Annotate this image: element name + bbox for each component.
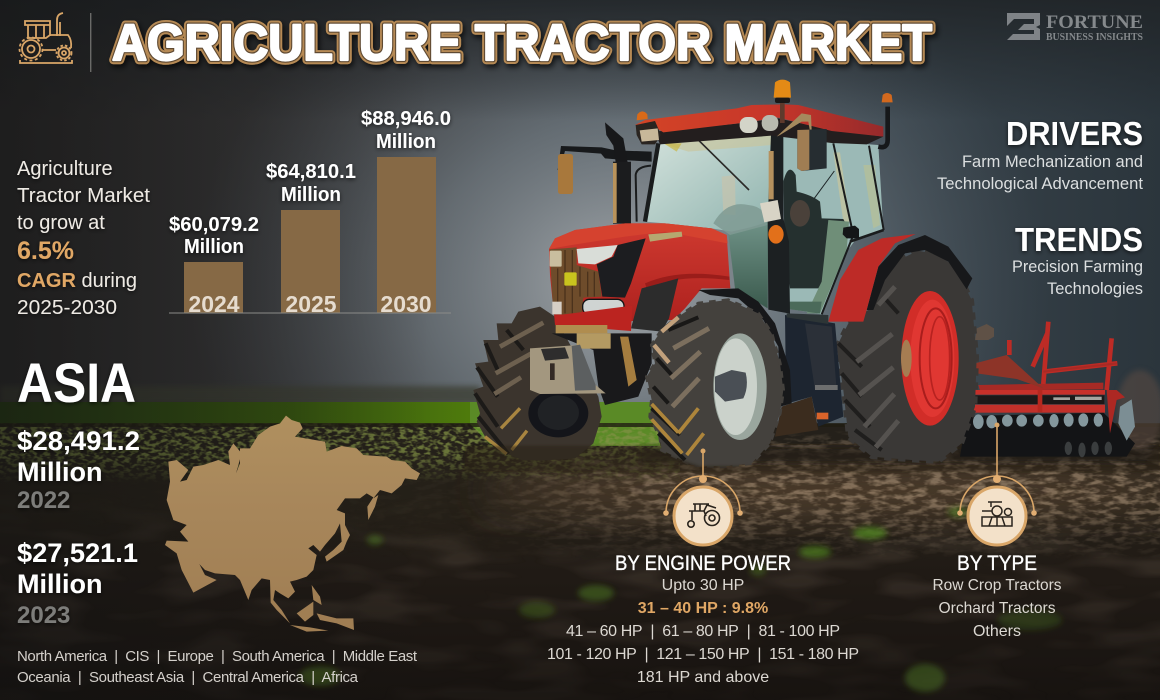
cab roof	[635, 104, 883, 137]
field dirt at wheel base	[465, 440, 1160, 472]
CAGR text block: to grow at	[17, 212, 105, 234]
bar 2030: 2030	[380, 291, 432, 317]
title: AGRICULTURE TRACTOR MARKET	[112, 14, 932, 71]
beacons	[774, 80, 791, 98]
CAGR text block: 2025-2030	[17, 297, 117, 319]
Asia stats: ASIA	[17, 351, 136, 414]
Asia stats	[17, 351, 140, 629]
bar 2030: Million	[376, 131, 436, 153]
icon: tractor on field	[982, 502, 1012, 526]
drivers block	[937, 115, 1143, 193]
bar 2030: $88,946.0	[361, 107, 451, 130]
trends block	[1012, 221, 1143, 298]
logo: Fortune Business Insights: FORTUNE	[1046, 12, 1143, 33]
Asia stats: Million	[17, 569, 102, 599]
CAGR text block	[17, 158, 150, 319]
trends block: TRENDS	[1015, 221, 1143, 258]
engine power segment text: 31 – 40 HP : 9.8%	[638, 600, 768, 617]
other regions list: North America | CIS | Europe | South America | Middle East	[17, 648, 418, 665]
front ballast and engine underside	[530, 325, 652, 405]
type segment text: Orchard Tractors	[938, 600, 1056, 617]
map: Asia	[165, 416, 420, 632]
engine power segment text: BY ENGINE POWER	[615, 552, 791, 575]
fenders	[698, 234, 972, 407]
trends block: Precision Farming	[1012, 258, 1143, 276]
bar 2024	[169, 213, 259, 317]
type segment text	[932, 552, 1062, 640]
engine power segment text: 181 HP and above	[637, 669, 769, 686]
out-of-focus seedlings	[300, 507, 1062, 692]
bar chart	[169, 107, 451, 317]
bar 2024: $60,079.2	[169, 213, 259, 236]
drivers block: DRIVERS	[1006, 115, 1143, 152]
logo: Fortune Business Insights: BUSINESS INSIGHTS	[1046, 31, 1143, 43]
CAGR text block: Tractor Market	[17, 185, 150, 207]
bar 2025: Million	[281, 184, 341, 206]
title: AGRICULTURE TRACTOR MARKET	[112, 14, 932, 71]
right mirror	[797, 129, 827, 171]
drivers block: Technological Advancement	[937, 175, 1143, 193]
steps and chassis	[775, 313, 843, 437]
connector and icon: type	[957, 422, 1037, 545]
bar 2024: Million	[184, 236, 244, 258]
CAGR text block: CAGR during	[17, 270, 137, 292]
title: AGRICULTURE TRACTOR MARKET	[112, 14, 932, 71]
engine power segment text: Upto 30 HP	[662, 577, 744, 594]
bar 2024: 2024	[188, 291, 240, 317]
bar 2025: $64,810.1	[266, 160, 356, 183]
engine power segment text	[547, 552, 859, 686]
CAGR text block: Agriculture	[17, 158, 113, 180]
Asia stats: $27,521.1	[17, 538, 138, 568]
CAGR text block: 6.5%	[17, 237, 74, 265]
bar 2025: 2025	[285, 291, 337, 317]
cab	[558, 80, 893, 314]
drivers block: Farm Mechanization and	[962, 153, 1143, 171]
logo: Fortune Business Insights	[1007, 12, 1143, 43]
trends block: Technologies	[1047, 280, 1143, 298]
bar 2030	[361, 107, 451, 317]
left mirror and exhaust	[558, 146, 652, 170]
front wheel	[647, 300, 783, 467]
type segment text: Others	[973, 623, 1021, 640]
Asia stats: 2023	[17, 602, 70, 629]
type segment text: BY TYPE	[957, 552, 1037, 575]
Asia stats: Million	[17, 457, 102, 487]
engine power segment text: 101 - 120 HP | 121 – 150 HP | 151 - 180 HP	[547, 646, 859, 663]
other regions list: Oceania | Southeast Asia | Central America | Africa	[17, 669, 359, 686]
bar 2025	[266, 160, 356, 317]
hood and engine front	[549, 223, 730, 332]
connector and icon: engine power	[663, 448, 743, 545]
far front wheel	[473, 307, 602, 461]
implement: disc harrow	[960, 322, 1160, 457]
tractor illustration	[465, 80, 1160, 472]
engine power segment text: 41 – 60 HP | 61 – 80 HP | 81 - 100 HP	[566, 623, 840, 640]
Asia stats: 2022	[17, 487, 70, 514]
Asia stats: $28,491.2	[17, 426, 140, 456]
rear wheel	[837, 251, 977, 462]
type segment text: Row Crop Tractors	[932, 577, 1062, 594]
other regions list	[17, 648, 418, 686]
header divider	[90, 13, 91, 72]
header tractor icon	[20, 13, 72, 63]
icon: tractor	[688, 504, 720, 527]
